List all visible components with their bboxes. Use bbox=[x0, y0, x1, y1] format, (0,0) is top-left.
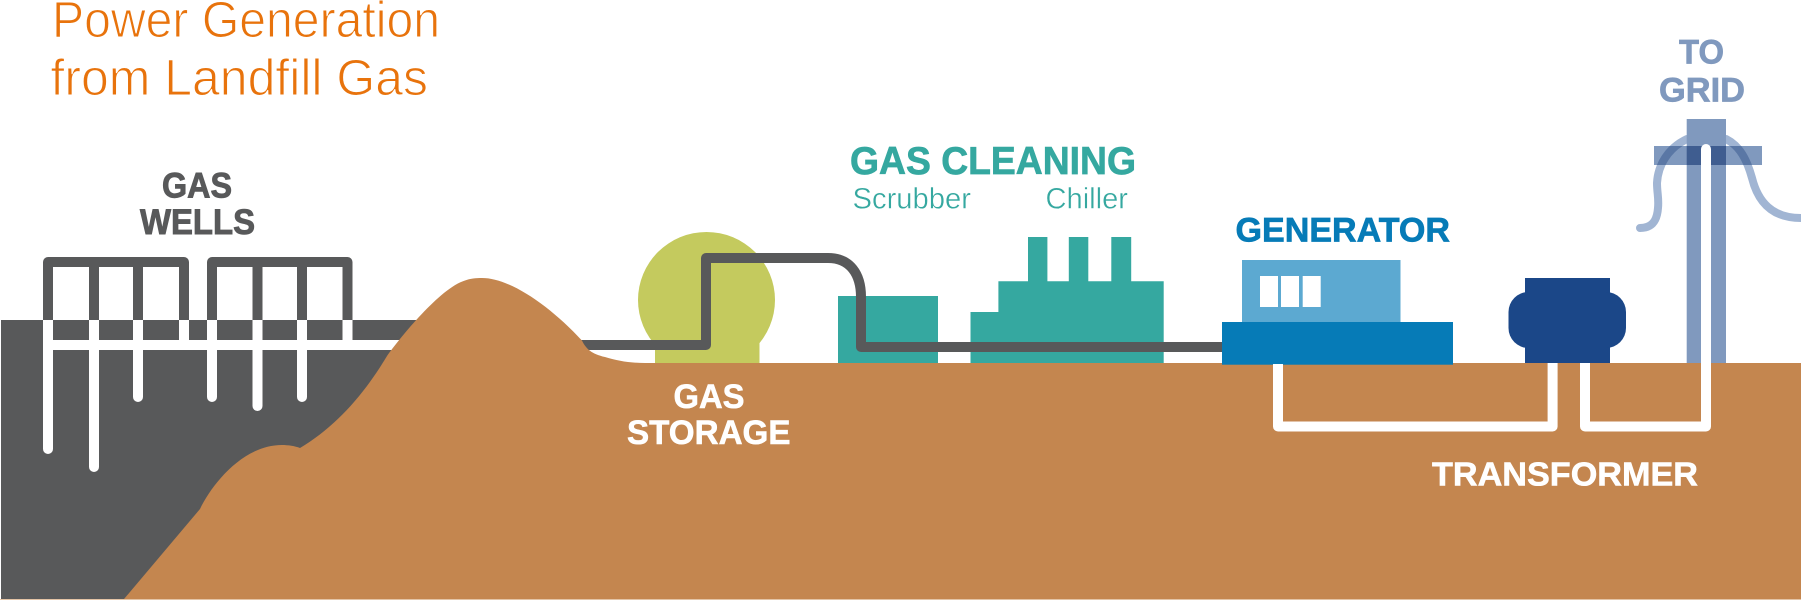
title bbox=[50, 0, 440, 106]
transformer bbox=[1508, 278, 1626, 363]
gas well pipes above ground bbox=[48, 262, 348, 320]
label: gas wells: WELLS bbox=[140, 203, 255, 242]
generator bbox=[1222, 260, 1453, 365]
label: to grid bbox=[1659, 33, 1745, 110]
label: to grid: TO bbox=[1679, 33, 1724, 71]
gas pipe bbox=[570, 258, 1230, 347]
utility pole bbox=[1654, 119, 1762, 363]
ground bottom edge bbox=[0, 599, 1801, 600]
label: gas storage: STORAGE bbox=[627, 414, 790, 452]
ground and landfill mound bbox=[124, 278, 1801, 599]
landfill waste block bbox=[1, 320, 461, 599]
gas storage tank bbox=[638, 232, 775, 368]
grid wires bbox=[1640, 139, 1801, 228]
gas well pipes below ground bbox=[48, 320, 420, 467]
chiller bbox=[970, 237, 1164, 364]
label: gas cleaning: GAS CLEANING bbox=[850, 140, 1136, 183]
label: transformer: TRANSFORMER bbox=[1432, 457, 1698, 494]
label: gas wells: GAS bbox=[162, 166, 232, 206]
label: scrubber: Scrubber bbox=[852, 183, 971, 216]
label: generator: GENERATOR bbox=[1236, 212, 1450, 250]
label: to grid: GRID bbox=[1659, 72, 1745, 110]
generator to transformer cable bbox=[1278, 363, 1553, 426]
label: chiller: Chiller bbox=[1046, 183, 1128, 216]
label: gas wells bbox=[140, 166, 255, 242]
title: from Landfill Gas bbox=[50, 49, 428, 106]
scrubber bbox=[838, 296, 938, 364]
label: gas storage bbox=[627, 378, 790, 452]
label: gas storage: GAS bbox=[674, 378, 744, 416]
transformer to grid cable bbox=[1585, 149, 1706, 426]
